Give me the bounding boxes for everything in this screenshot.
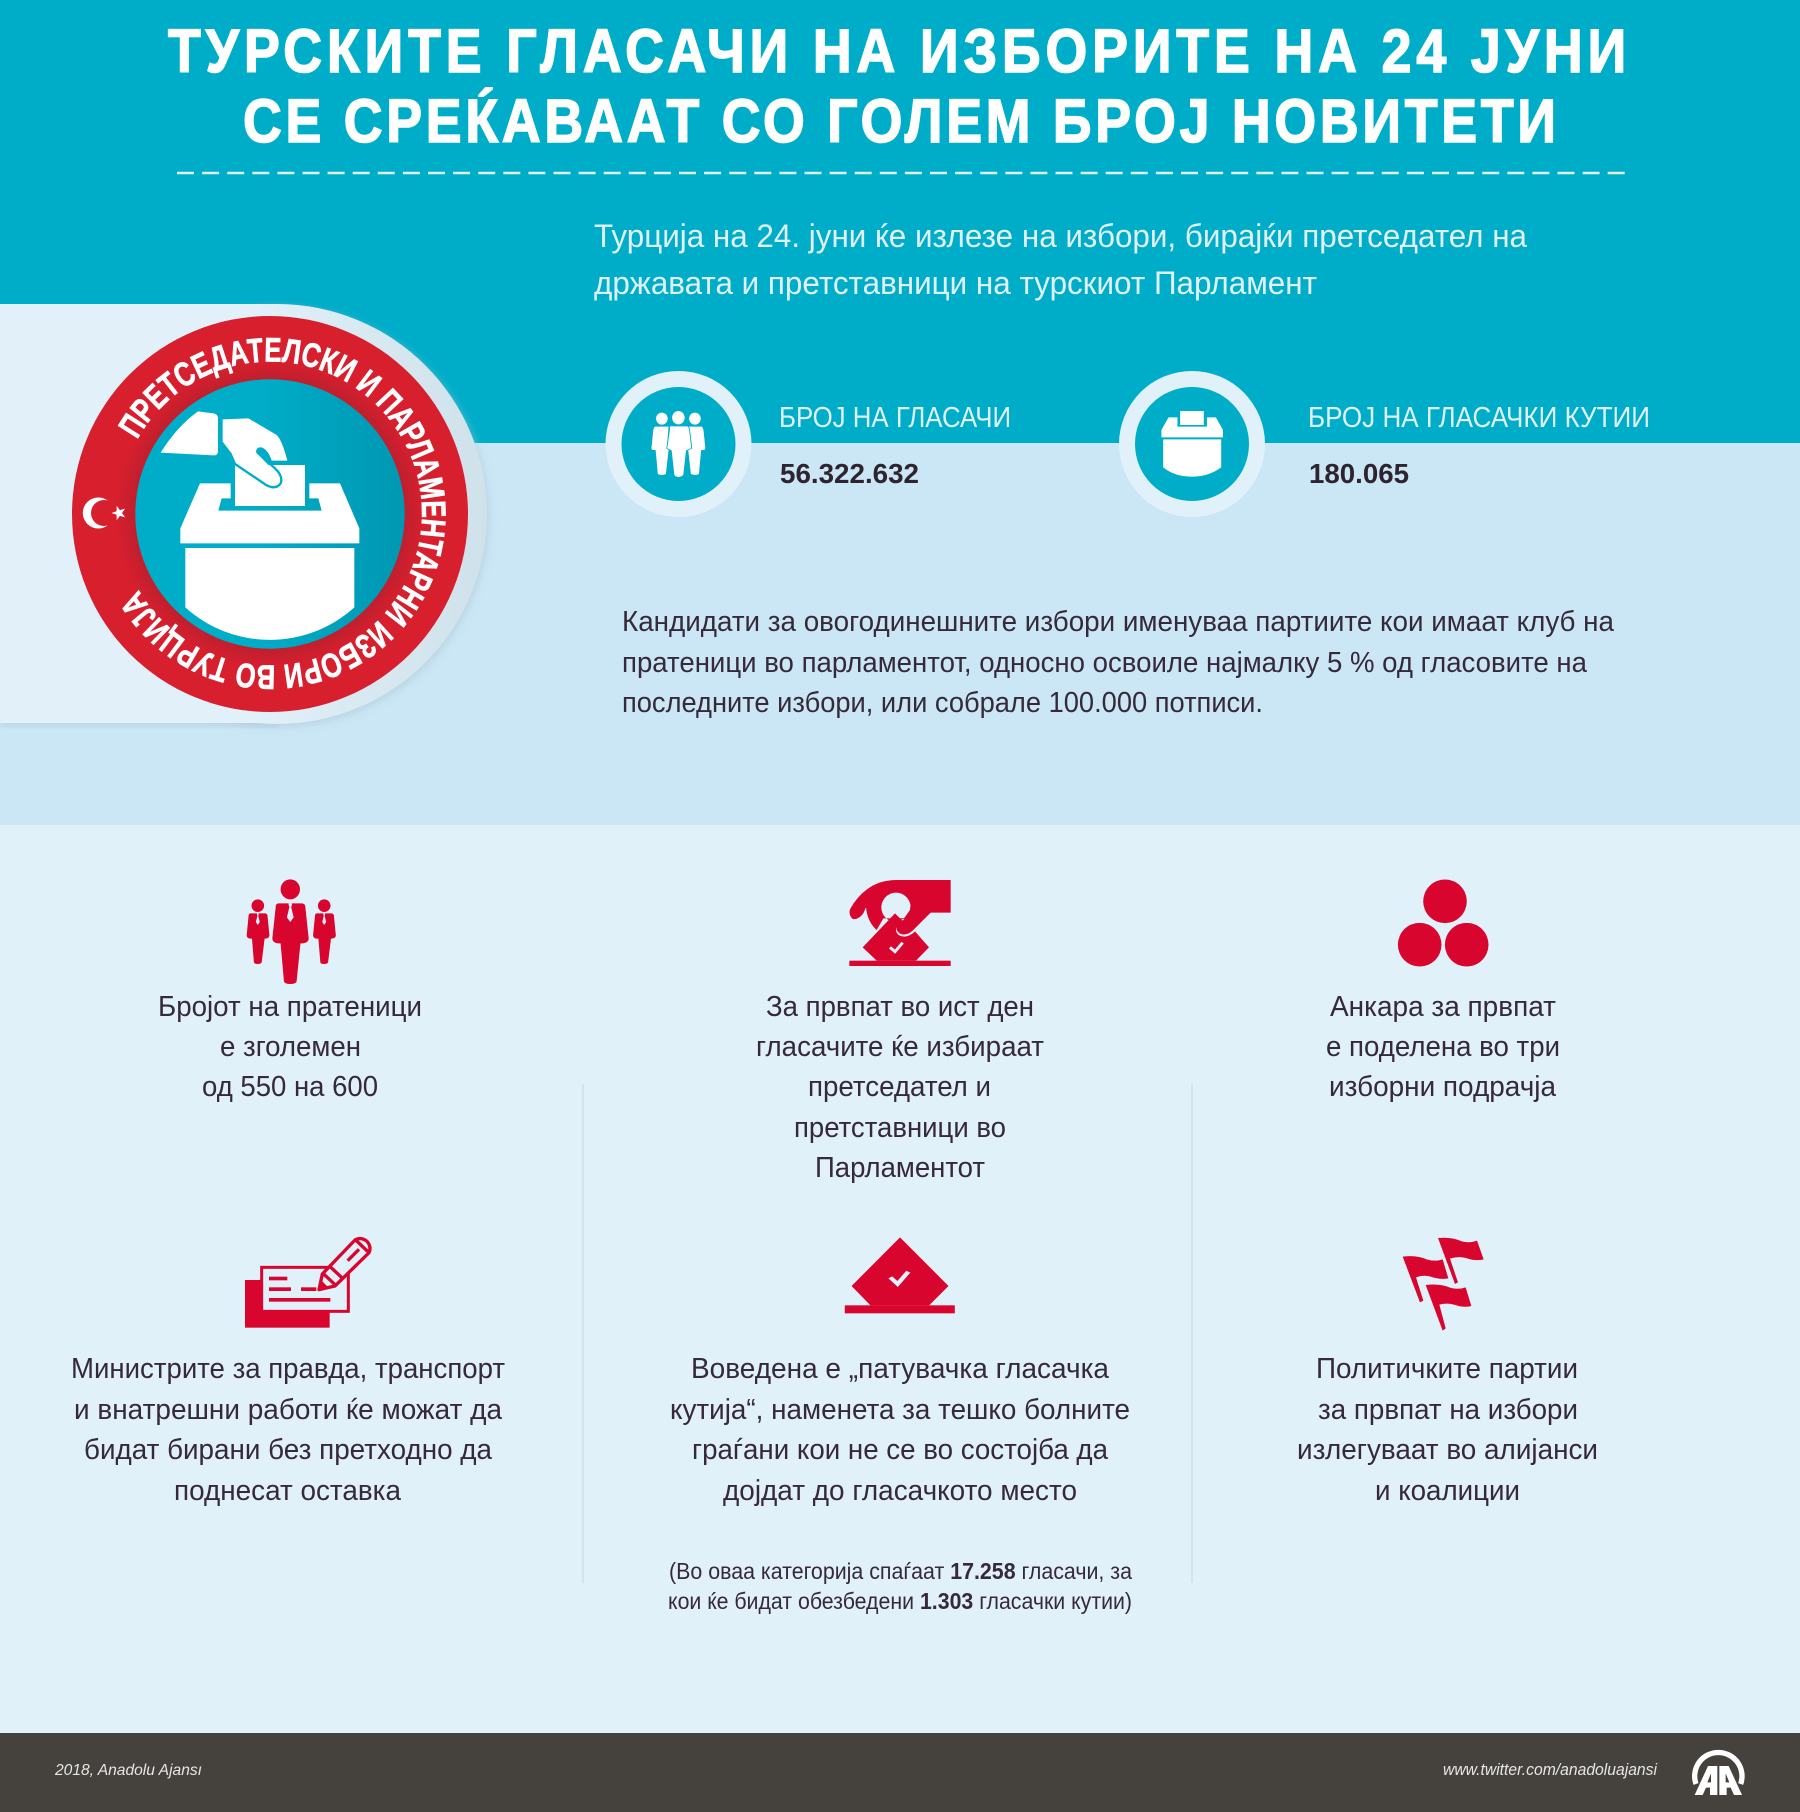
badge teal disc	[135, 379, 405, 649]
text: ministers: Министрите за правда, транспорт	[71, 1353, 505, 1385]
item: alliances	[1297, 1238, 1598, 1507]
icon: ballot box	[1119, 371, 1265, 517]
text: MPs: Бројот на пратеници	[158, 991, 422, 1023]
text: same-day vote: За првпат во ист ден	[766, 991, 1034, 1023]
item: Ankara districts	[1326, 880, 1560, 1103]
text: same-day vote	[756, 991, 1044, 1184]
icon: three circles	[1398, 880, 1488, 966]
lower panel background	[0, 825, 1800, 1733]
panel: number of ballot boxes	[1119, 371, 1650, 517]
intro text: Турција на 24. јуни ќе излезе на избори, бирајќи претседател на	[594, 218, 1527, 254]
title	[168, 18, 1626, 156]
note: mobile ballot box figures: (Во оваа категорија спаѓаат 17.258 гласачи, за	[669, 1558, 1133, 1584]
icon: turkish crescent and star	[83, 498, 125, 528]
item: ministers	[71, 1239, 505, 1507]
text: Ankara districts: изборни подрачја	[1329, 1071, 1557, 1103]
footer credit: 2018, Anadolu Ajansı	[54, 1762, 202, 1779]
text: alliances: излегуваат во алијанси	[1297, 1434, 1598, 1466]
footer	[0, 1733, 1800, 1812]
text: mobile ballot box: дојдат до гласачкото место	[723, 1475, 1077, 1507]
note: mobile ballot box figures: кои ќе бидат обезбедени 1.303 гласачки кутии)	[668, 1588, 1132, 1614]
text: same-day vote: Парламентот	[815, 1152, 985, 1184]
candidates paragraph: пратеници во парламентот, односно освоиле најмалку 5 % од гласовите на	[622, 647, 1588, 679]
icon: MPs	[247, 879, 336, 984]
icon: ballot with check	[845, 1237, 955, 1313]
candidates paragraph	[622, 606, 1615, 719]
text: alliances: Политичките партии	[1316, 1353, 1578, 1385]
text: alliances: за првпат на избори	[1318, 1394, 1578, 1426]
text: mobile ballot box: Воведена е „патувачка гласачка	[691, 1353, 1110, 1385]
text: ministers: и внатрешни работи ќе можат да	[74, 1394, 503, 1426]
text: alliances: и коалиции	[1375, 1475, 1520, 1507]
item: mobile ballot box	[668, 1237, 1133, 1614]
item: number of MPs	[158, 879, 422, 1103]
icon: form and pencil	[245, 1239, 370, 1328]
text: Ankara districts: е поделена во три	[1326, 1031, 1560, 1063]
candidates paragraph: последните избори, или собрале 100.000 потписи.	[622, 687, 1263, 719]
label: voters: БРОЈ НА ГЛАСАЧИ	[779, 402, 1011, 434]
intro text: државата и претставници на турскиот Парламент	[594, 265, 1317, 301]
value: ballot boxes: 180.065	[1309, 458, 1409, 489]
panel: number of voters	[606, 371, 1011, 517]
text: mobile ballot box	[670, 1353, 1130, 1507]
icon: hand with ballot	[849, 880, 951, 966]
panel: election badge	[0, 302, 489, 728]
text: mobile ballot box: граѓани кои не се во состојба да	[692, 1434, 1109, 1466]
icon: AA logo	[1695, 1753, 1742, 1795]
text: ministers	[71, 1353, 505, 1507]
text: MPs: е зголемен	[220, 1031, 361, 1063]
icon: hand placing ballot in box	[161, 411, 359, 640]
title: СЕ СРЕЌАВААТ СО ГОЛЕМ БРОЈ НОВИТЕТИ	[243, 88, 1556, 156]
text: same-day vote: гласачите ќе избираат	[756, 1031, 1044, 1063]
badge red ring	[72, 316, 468, 712]
value: voters: 56.322.632	[780, 458, 919, 489]
text: alliances	[1297, 1353, 1598, 1507]
header background	[0, 0, 1800, 443]
text: Ankara districts: Анкара за првпат	[1330, 991, 1556, 1023]
text: Ankara districts	[1326, 991, 1560, 1103]
title: ТУРСКИТЕ ГЛАСАЧИ НА ИЗБОРИТЕ НА 24 ЈУНИ	[168, 18, 1626, 86]
text: MPs	[158, 991, 422, 1103]
text: same-day vote: претседател и	[808, 1071, 991, 1103]
note: mobile ballot box figures	[668, 1558, 1133, 1614]
text: ministers: бидат бирани без претходно да	[84, 1434, 493, 1466]
label: ballot boxes: БРОЈ НА ГЛАСАЧКИ КУТИИ	[1308, 402, 1650, 434]
text: ministers: поднесат оставка	[174, 1475, 402, 1507]
text: MPs: од 550 на 600	[202, 1071, 378, 1103]
intro text	[594, 218, 1527, 301]
text: same-day vote: претставници во	[794, 1112, 1006, 1144]
icon: voters	[606, 371, 752, 517]
item: same-day vote	[756, 880, 1044, 1184]
footer url: www.twitter.com/anadoluajansi	[1443, 1760, 1658, 1779]
badge ring text: ПРЕТСЕДАТЕЛСКИ И ПАРЛАМЕНТАРНИ ИЗБОРИ ВО ТУРЦИЈА	[118, 338, 446, 690]
icon: three flags	[1403, 1238, 1484, 1331]
text: mobile ballot box: кутија“, наменета за тешко болните	[670, 1394, 1130, 1426]
candidates paragraph: Кандидати за овогодинешните избори именуваа партиите кои имаат клуб на	[622, 606, 1615, 638]
intro band background	[0, 443, 1800, 825]
